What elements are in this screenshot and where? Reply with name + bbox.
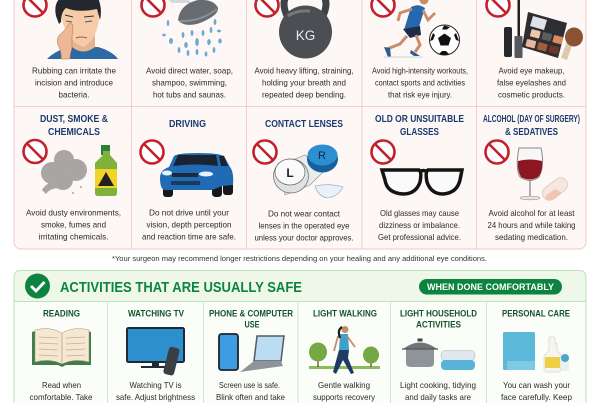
- heading: old glasses: [375, 114, 464, 138]
- text: dust: Avoid dusty environments,: [26, 208, 121, 218]
- text: lifting: repeated deep bending.: [262, 90, 346, 100]
- text: lifting: [254, 66, 354, 100]
- heading: phone and computer use: USE: [244, 320, 260, 330]
- heading: dust, smoke and chemicals: CHEMICALS: [48, 127, 100, 138]
- text: alcohol: Avoid alcohol for at least: [488, 208, 575, 218]
- cell: alcohol: [483, 114, 580, 242]
- heading: dust, smoke and chemicals: DUST, SMOKE &: [40, 114, 108, 125]
- text: watching tv: Watching TV is: [130, 380, 182, 390]
- icon: green check: [25, 274, 50, 298]
- text: alcohol: 24 hours and while taking: [488, 220, 576, 230]
- text: household: and daily tasks are: [405, 392, 471, 402]
- text: alcohol: sedating medication.: [495, 232, 568, 242]
- text: rubbing: [32, 66, 116, 100]
- text: lifting: holding your breath and: [262, 78, 346, 88]
- text: household: [400, 380, 476, 402]
- heading: household: [400, 308, 477, 330]
- text: personal care: You can wash your: [503, 380, 570, 390]
- icon: runner and ball: [384, 0, 460, 57]
- icon: no sign: [142, 0, 164, 16]
- text: water: shampoo, swimming,: [152, 78, 227, 88]
- text: driving: and reaction time are safe.: [142, 232, 236, 242]
- text: walking: supports recovery: [313, 392, 376, 402]
- heading: phone and computer use: PHONE & COMPUTER: [209, 308, 293, 318]
- text: contact lenses: unless your doctor approves.: [254, 232, 354, 242]
- cell: lifting: [254, 0, 354, 100]
- icon: shower head: [162, 0, 222, 56]
- heading: old glasses: OLD OR UNSUITABLE: [375, 114, 464, 125]
- text: contact lenses: Do not wear contact: [268, 208, 341, 218]
- text: reading: Read when: [42, 380, 81, 390]
- icon: open book: [32, 329, 91, 367]
- heading: watching tv: WATCHING TV: [128, 308, 184, 318]
- text: rubbing: bacteria.: [58, 90, 90, 100]
- heading: driving: DRIVING: [169, 119, 206, 130]
- panel: activities to avoid: [14, 0, 586, 249]
- text: sports: Avoid high-intensity workouts,: [372, 66, 468, 76]
- cell: dust: [24, 114, 121, 242]
- badge: when done comfortably: WHEN DONE COMFORTABLY: [427, 282, 554, 292]
- text: driving: vision, depth perception: [146, 220, 232, 230]
- text: personal care: face carefully. Keep: [501, 392, 572, 402]
- icon: towel and soap: [503, 332, 569, 372]
- heading: alcohol and sedatives: [483, 114, 580, 138]
- text: water: hot tubs and saunas.: [153, 90, 226, 100]
- icon: no sign: [372, 140, 394, 164]
- text: walking: [313, 380, 376, 402]
- text: old glasses: dizziness or imbalance.: [379, 220, 460, 230]
- text: alcohol: [488, 208, 576, 242]
- text: personal care: [501, 380, 572, 402]
- text: phone and computer: Blink often and take: [216, 392, 285, 402]
- text: old glasses: Old glasses may cause: [380, 208, 459, 218]
- icon: chemical bottle: [95, 145, 117, 196]
- text: old glasses: Get professional advice.: [378, 232, 461, 242]
- icon: no sign: [254, 140, 276, 164]
- heading: dust, smoke and chemicals: [40, 114, 108, 138]
- text: sports: that risk eye injury.: [388, 90, 452, 100]
- cell: sports: [372, 0, 468, 100]
- cell: rubbing eyes: [24, 0, 118, 100]
- icon: man rubbing eye: [47, 0, 118, 59]
- cell: light household activities: [400, 308, 477, 402]
- text: sports: [372, 66, 468, 100]
- heading: phone and computer use: [209, 308, 293, 330]
- text: reading: comfortable. Take: [30, 392, 93, 402]
- text: reading: [30, 380, 93, 402]
- cell: water: [142, 0, 233, 100]
- cell: driving: [140, 119, 236, 242]
- badge: when done comfortably: [419, 279, 562, 294]
- icon: no sign: [24, 0, 46, 16]
- cell: contact lenses: [254, 119, 354, 242]
- icon: lens case: [274, 144, 343, 198]
- icon: no sign: [140, 140, 164, 164]
- text: watching tv: [116, 380, 195, 402]
- icon: no sign: [486, 0, 510, 16]
- icon: no sign: [486, 140, 508, 164]
- text: makeup: [497, 66, 566, 100]
- heading: personal care: PERSONAL CARE: [502, 308, 570, 318]
- text: contact lenses: [254, 208, 354, 242]
- heading: reading: READING: [43, 308, 80, 318]
- text: rubbing: Rubbing can irritate the: [32, 66, 116, 76]
- icon: walking woman and trees: [309, 326, 380, 374]
- icon: lens case: R: [318, 150, 326, 162]
- icon: pot and towels: [402, 338, 475, 370]
- heading: activities that are usually safe: ACTIVITIES THAT ARE USUALLY SAFE: [60, 280, 302, 296]
- text: makeup: Avoid eye makeup,: [498, 66, 564, 76]
- text: phone and computer: Screen use is safe.: [219, 380, 280, 390]
- icon: black glasses: [382, 170, 462, 194]
- text: driving: Do not drive until your: [149, 208, 229, 218]
- text: dust: smoke, fumes and: [41, 220, 106, 230]
- text: lifting: Avoid heavy lifting, straining,: [254, 66, 354, 76]
- text: old glasses: [378, 208, 461, 242]
- text: driving: [142, 208, 236, 242]
- panel: usually safe activities: [14, 270, 586, 403]
- cell: reading: [30, 308, 93, 402]
- text: water: Avoid direct water, soap,: [146, 66, 233, 76]
- text: sports: contact sports and activities: [375, 78, 465, 88]
- icon: lens case: L: [286, 166, 294, 180]
- footnote: *Your surgeon may recommend longer restrictions depending on your healing and any additional eye conditions.: [112, 254, 487, 263]
- cell: makeup: [486, 0, 583, 100]
- icon: wine glass and pill: [517, 148, 570, 203]
- text: dust: [26, 208, 121, 242]
- cell: watching tv: [116, 308, 195, 402]
- text: makeup: false eyelashes and: [497, 78, 566, 88]
- icon: no sign: [372, 0, 394, 16]
- icon: makeup set: [504, 0, 583, 60]
- cell: personal care: [501, 308, 572, 402]
- panel header: [14, 270, 586, 302]
- text: rubbing: incision and introduce: [35, 78, 113, 88]
- cell: phone and computer use: [209, 308, 293, 402]
- heading: light walking: LIGHT WALKING: [313, 308, 377, 318]
- heading: household: LIGHT HOUSEHOLD: [400, 308, 477, 318]
- icon: tv and remote: [127, 328, 184, 376]
- heading: contact lenses: CONTACT LENSES: [265, 119, 343, 130]
- text: watching tv: safe. Adjust brightness: [116, 392, 195, 402]
- icon: smoke cloud: [41, 150, 87, 194]
- cell: light walking: [309, 308, 380, 402]
- text: makeup: cosmetic products.: [498, 90, 565, 100]
- icon: blue car: [160, 153, 233, 197]
- cell: old glasses: [372, 114, 464, 242]
- text: water: [146, 66, 233, 100]
- text: walking: Gentle walking: [318, 380, 370, 390]
- heading: alcohol and sedatives: & SEDATIVES: [505, 127, 558, 138]
- heading: old glasses: GLASSES: [400, 127, 439, 138]
- icon: no sign: [256, 0, 278, 16]
- text: phone and computer: [216, 380, 285, 402]
- icon: no sign: [24, 140, 46, 163]
- text: contact lenses: lenses in the operated eye: [258, 220, 350, 230]
- text: household: Light cooking, tidying: [400, 380, 476, 390]
- heading: household: ACTIVITIES: [416, 320, 461, 330]
- text: dust: irritating chemicals.: [38, 232, 108, 242]
- icon: phone and laptop: [219, 334, 284, 372]
- icon: kettlebell: KG: [296, 28, 315, 43]
